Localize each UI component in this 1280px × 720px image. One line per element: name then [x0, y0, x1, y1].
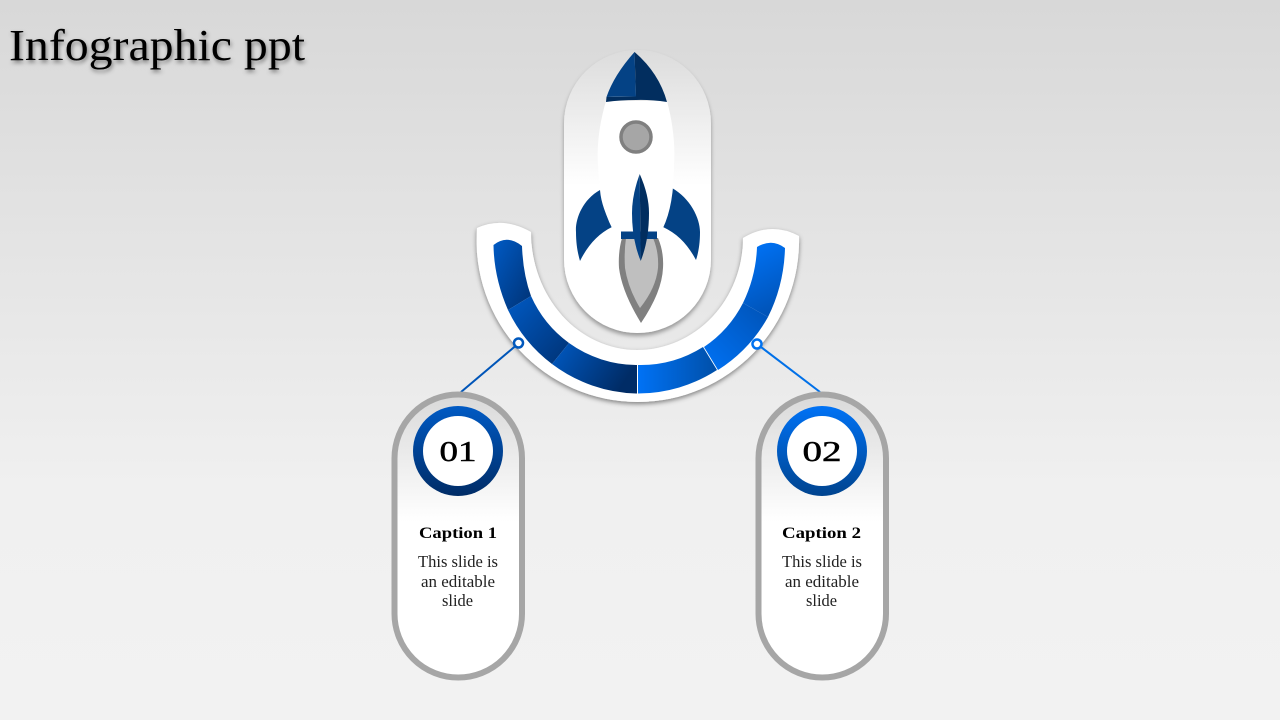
connector: right [752, 340, 820, 392]
card outline [394, 394, 522, 678]
panel: caption 1 [394, 394, 522, 678]
title: Infographic ppt [9, 21, 305, 70]
rocket nose left [606, 52, 636, 97]
rocket fin right [663, 188, 700, 260]
rocket window [621, 122, 651, 152]
rocket capsule [564, 50, 711, 333]
segment: left middle [508, 296, 569, 364]
caption body: slide [442, 591, 473, 610]
connector: left [461, 338, 523, 392]
semicircular ring chart [477, 223, 799, 402]
card outline [758, 394, 886, 678]
segment: right middle [704, 303, 768, 370]
icon: rocket [576, 52, 700, 323]
caption body [418, 552, 498, 610]
number badge 01: 01 [440, 436, 476, 468]
segment: left bottom [552, 343, 637, 394]
rocket centre fin right [640, 174, 649, 261]
number badge 01 [413, 406, 503, 496]
white ring backing [477, 223, 799, 402]
rocket fin left [576, 190, 612, 261]
caption heading: Caption 1 [419, 525, 497, 542]
caption body: an editable [785, 572, 859, 591]
caption body: This slide is [418, 552, 498, 571]
rocket centre fin left [632, 174, 641, 261]
segment: right bottom [638, 347, 717, 394]
caption body: This slide is [782, 552, 862, 571]
flame outer [619, 238, 663, 323]
number badge 02: 02 [802, 436, 842, 468]
segment: right top [743, 243, 785, 317]
segment: left top [494, 240, 531, 310]
rocket nose base strip [606, 96, 636, 102]
flame inner [625, 238, 658, 308]
rocket body [598, 101, 674, 228]
rocket nose right [634, 52, 667, 102]
rocket crossbar [621, 232, 657, 239]
caption heading: Caption 2 [782, 525, 861, 542]
caption body: an editable [421, 572, 495, 591]
number badge 02 [777, 406, 867, 496]
panel: caption 2 [758, 394, 886, 678]
caption body: slide [806, 591, 837, 610]
caption body [782, 552, 862, 610]
